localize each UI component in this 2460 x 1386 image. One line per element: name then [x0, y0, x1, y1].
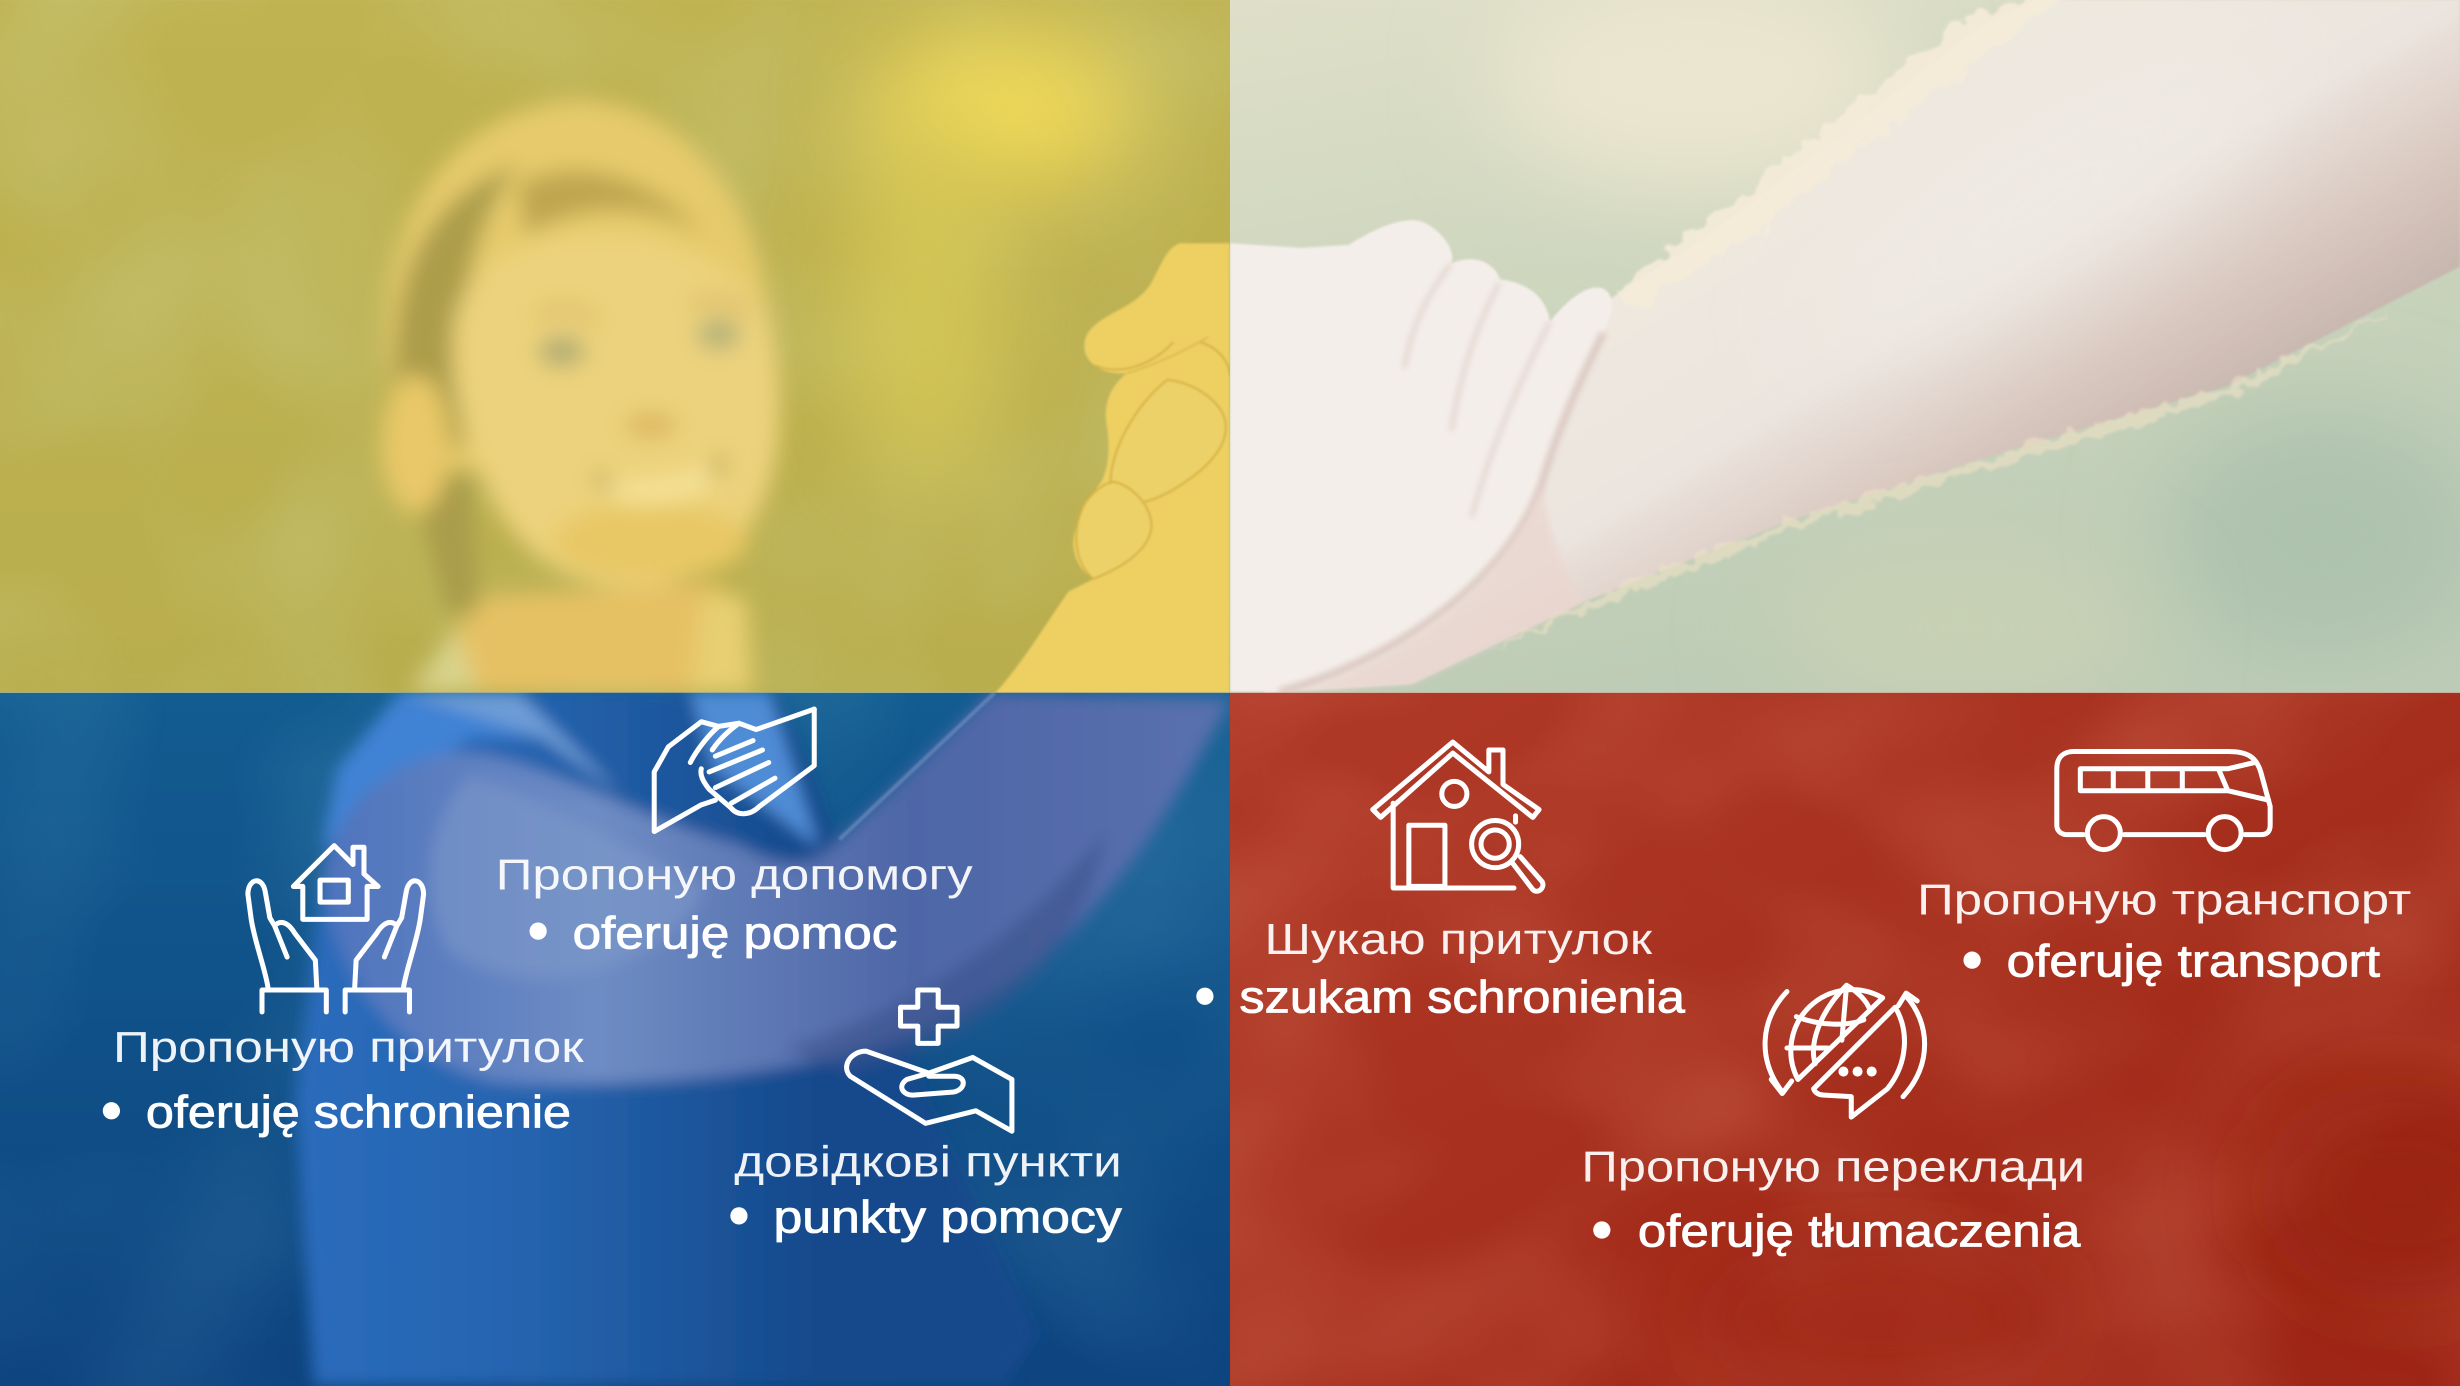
label: Ukrainian: Пропоную притулок — [113, 1023, 585, 1072]
panel: pale quadrant with man's arm — [1230, 0, 2460, 698]
icon: man's hand — [1230, 220, 1612, 692]
item: offer help — [496, 709, 973, 958]
item: offer transport — [1917, 752, 2411, 987]
item: looking for shelter — [1196, 742, 1686, 1023]
icon: yellow hand — [995, 243, 1230, 693]
icon: bus — [2057, 752, 2270, 850]
bullet and Polish label: punkty pomocy — [773, 1191, 1122, 1242]
icon: globe with speech bubble and arrows — [1765, 985, 1925, 1117]
bullet and Polish label: oferuję schronienie — [146, 1086, 571, 1137]
item: offer translation — [1581, 985, 2085, 1256]
panel: blue quadrant with woman's shirt and arm — [0, 692, 1230, 1386]
icon: house with magnifier — [1373, 742, 1543, 891]
arm — [1255, 0, 2460, 693]
panel: red quadrant — [1230, 693, 2460, 1386]
label: Ukrainian: довідкові пункти — [734, 1138, 1122, 1187]
bullet and Polish label: oferuję transport — [2007, 936, 2380, 987]
panel: yellow quadrant with woman's face — [0, 0, 1230, 693]
icon: handshake — [654, 709, 814, 832]
item: offer shelter — [103, 846, 585, 1137]
label: Ukrainian: Пропоную транспорт — [1917, 876, 2411, 925]
label: Ukrainian: Пропоную допомогу — [496, 851, 973, 900]
label: Ukrainian: Пропоную переклади — [1581, 1142, 2085, 1191]
icon: hand with medical cross — [847, 990, 1012, 1131]
bullet and Polish label: oferuję pomoc — [573, 907, 897, 958]
item: help points — [730, 990, 1122, 1242]
bullet and Polish label: szukam schronienia — [1239, 972, 1686, 1023]
bullet and Polish label: oferuję tłumaczenia — [1638, 1206, 2081, 1257]
icon: house in hands — [248, 846, 424, 1012]
label: Ukrainian: Шукаю притулок — [1265, 915, 1653, 964]
